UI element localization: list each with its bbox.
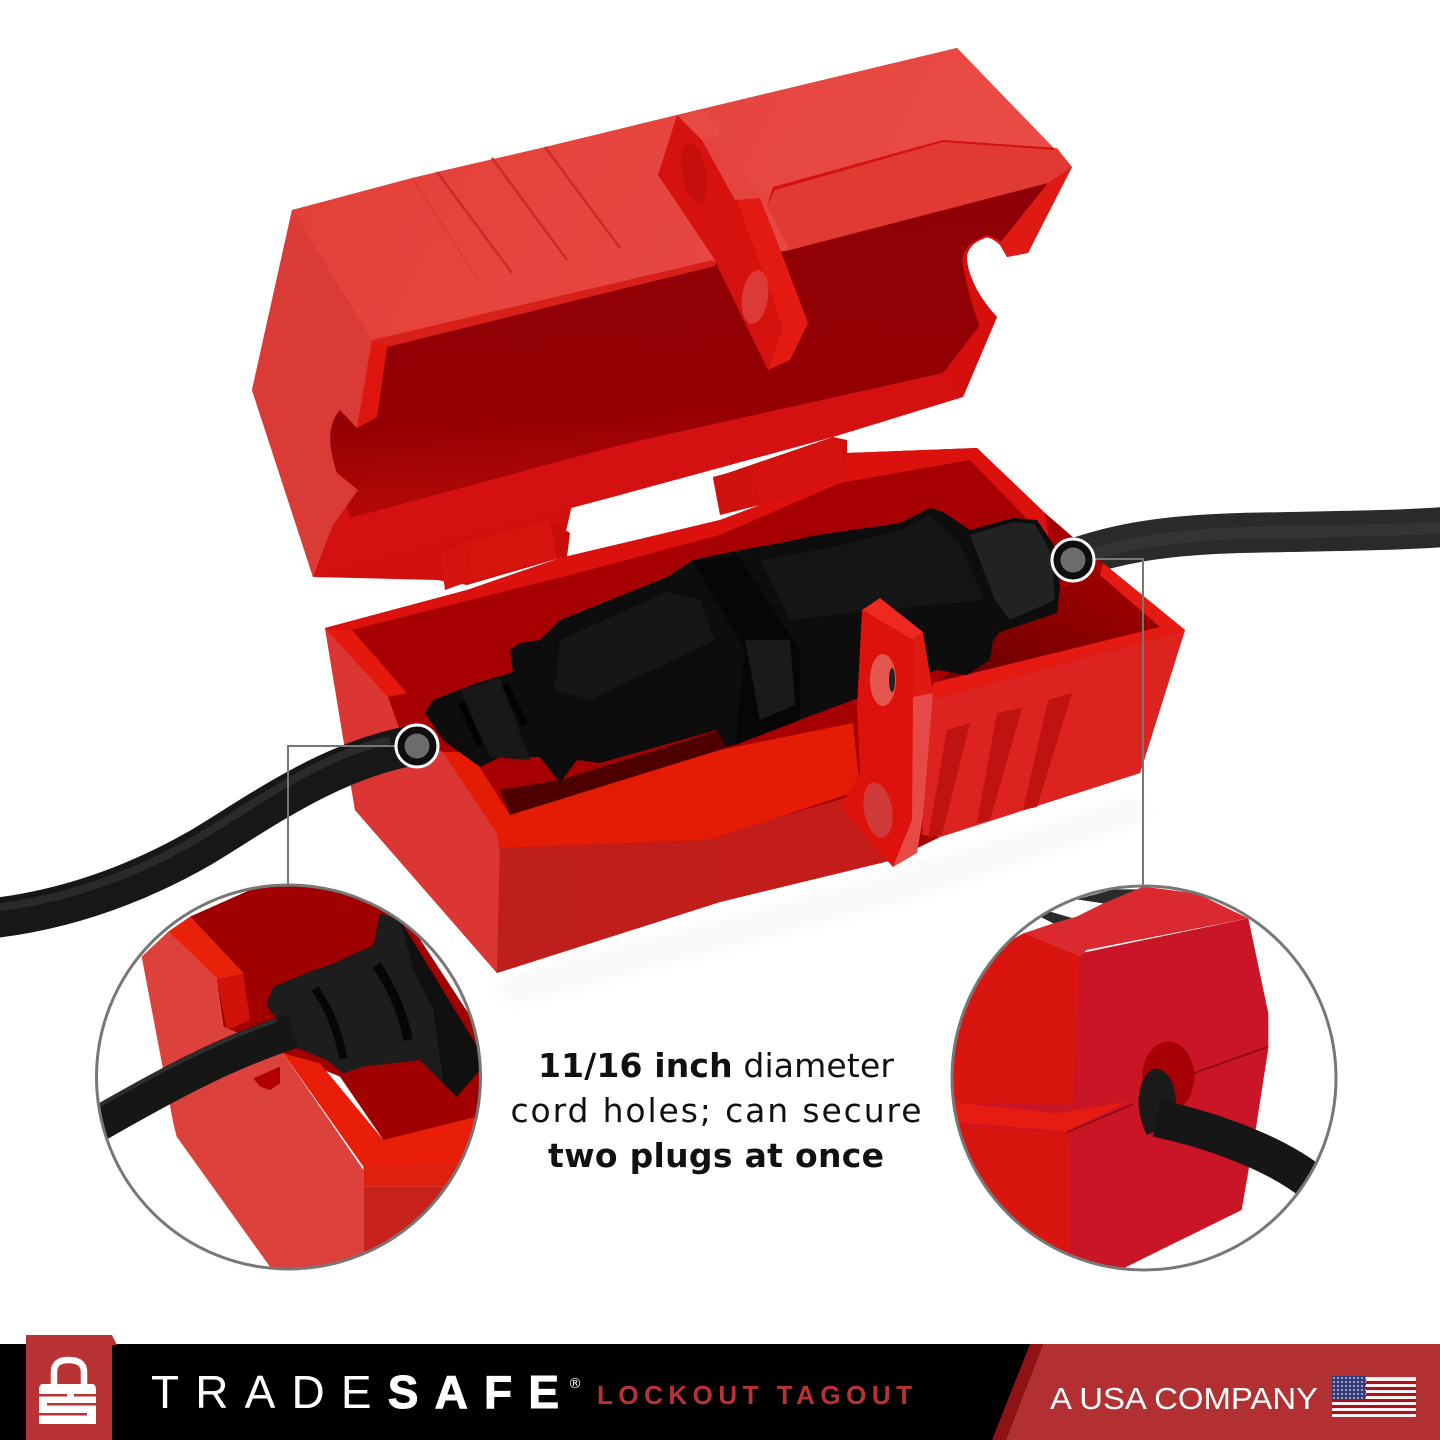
base front wall xyxy=(497,798,893,973)
callout text xyxy=(510,1046,922,1175)
base interior xyxy=(352,460,1160,815)
callout marker right xyxy=(1052,539,1094,581)
logo tab xyxy=(26,1335,117,1440)
callout connector right xyxy=(1090,559,1143,885)
lid flap xyxy=(767,142,1072,250)
base left inner wall xyxy=(325,628,407,697)
lid ribs xyxy=(412,147,620,280)
callout marker left xyxy=(396,725,438,767)
lid left end face xyxy=(252,210,372,577)
base ribs xyxy=(928,693,1072,838)
lid right notch wall xyxy=(943,236,997,397)
icon: padlock xyxy=(39,1360,96,1424)
brand name: TRADE SAFE xyxy=(151,1366,559,1418)
footer dark wedge xyxy=(992,1344,1043,1440)
hinge backing xyxy=(313,437,847,585)
base left end face xyxy=(325,628,500,973)
callout connector left xyxy=(288,746,398,884)
icon: US flag xyxy=(1332,1376,1416,1417)
base right rim xyxy=(930,563,1185,700)
lid padlock tab xyxy=(658,110,808,370)
usa company label: A USA COMPANY xyxy=(1050,1381,1318,1416)
lid right wall xyxy=(1000,167,1072,257)
lid front edge band xyxy=(372,260,715,347)
footer bar xyxy=(0,1335,1440,1440)
cable: right side xyxy=(1070,527,1440,560)
lockout box base xyxy=(325,448,1185,973)
callout text: 11/16 inch diameter xyxy=(538,1046,894,1085)
base front rim xyxy=(443,723,860,848)
base floor right xyxy=(940,570,1160,680)
base underlay xyxy=(325,448,1185,973)
callout text: cord holes; can secure xyxy=(510,1091,922,1130)
cable: left side xyxy=(0,740,415,918)
footer red section xyxy=(1006,1344,1440,1440)
inset circle: cord at plug end xyxy=(95,884,482,1270)
base right long wall xyxy=(922,630,1185,837)
lid xyxy=(252,48,1072,577)
hinges xyxy=(440,440,847,590)
registered mark: ® xyxy=(568,1376,582,1392)
lid outline body xyxy=(252,48,1072,577)
lid left inner wall xyxy=(357,340,387,428)
base back rim xyxy=(325,448,1050,630)
product line: LOCKOUT TAGOUT xyxy=(597,1380,912,1410)
callout text: two plugs at once xyxy=(548,1136,884,1175)
black plugs xyxy=(425,508,1060,783)
lid interior xyxy=(325,183,1048,518)
base floor left xyxy=(500,730,735,815)
soft shadow under box xyxy=(500,800,1145,1000)
base padlock tab xyxy=(840,598,933,867)
inset circle: cord hole in closed box xyxy=(940,886,1336,1290)
lid top face xyxy=(292,48,1072,340)
